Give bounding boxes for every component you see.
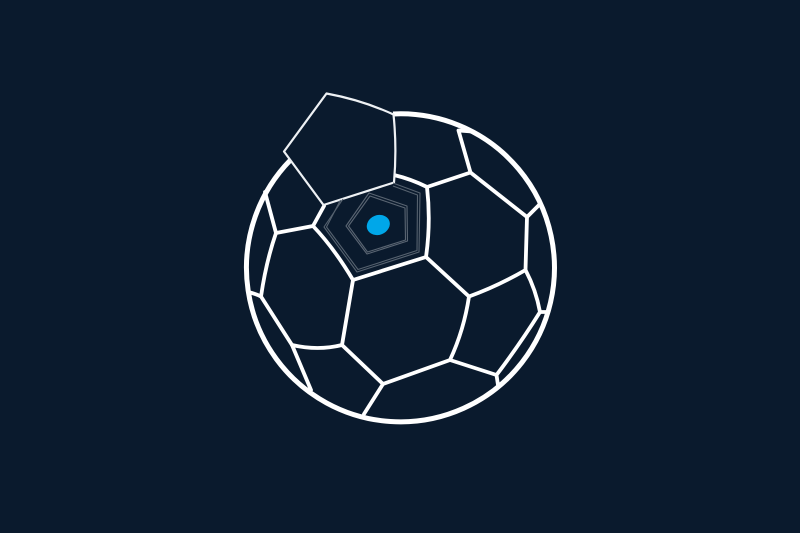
ball seams [250, 130, 546, 414]
blue spot [364, 211, 393, 239]
shadow rings: inner [346, 193, 408, 254]
ball outline [246, 114, 554, 422]
lifted panel [284, 94, 395, 205]
shadow rings: outer [324, 183, 420, 272]
